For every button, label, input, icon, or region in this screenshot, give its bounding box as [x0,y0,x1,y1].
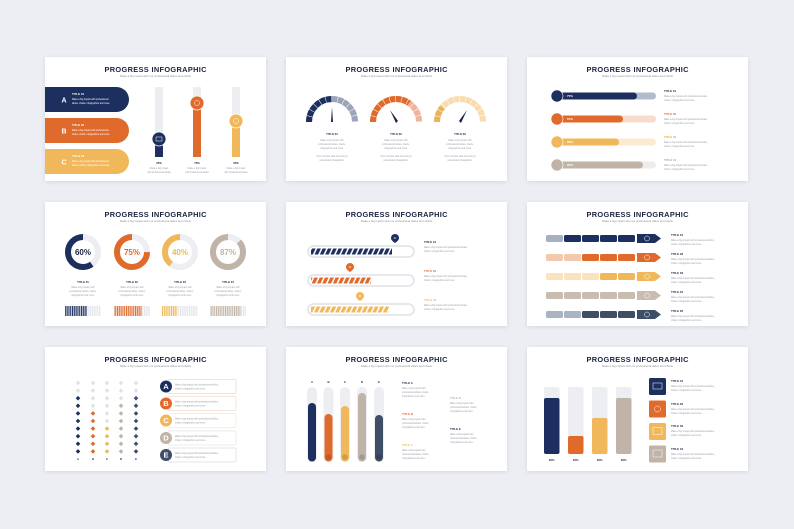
bar row 3 [551,135,708,148]
list A [160,380,236,394]
column bars: 25% [573,458,579,462]
row 01: Make a big impact with professional slides, [671,239,715,242]
pill bars: C [344,380,346,384]
gauge 2: Turn complex data into easy to [380,155,412,158]
gauge 1: infographics and more. [320,147,344,150]
tab B: Make a big impact with professional [72,129,109,132]
track 02: Make a big impact with professional slides, [424,275,468,278]
tab C: TITLE 03 [72,154,84,158]
title [346,65,448,78]
title: Make a big impact with our professional slides and charts [120,74,192,78]
icon item 02 [649,400,715,418]
tab C: Make a big impact with professional [72,160,109,163]
text E: professional slides, charts, [450,437,477,440]
tab C: C [61,160,67,166]
diamond chart: C [106,457,108,461]
track 03: 03 [359,296,362,298]
tab C [45,149,129,174]
track 03: charts, infographics and more. [424,308,455,311]
bar row 3: 58% [567,140,573,144]
text A: Make a big impact with [402,387,426,390]
bar row 2: TITLE 02 [664,112,676,116]
title: PROGRESS INFOGRAPHIC [586,210,689,219]
row 03 [546,271,715,284]
bar 75% [185,87,210,174]
tab A: A [61,98,67,104]
pill bars: D [361,380,363,384]
row 05: Make a big impact with professional slides, [671,315,715,318]
donut 87%: TITLE 04 [222,280,234,284]
icon item 02: charts, infographics and more. [671,412,702,415]
bar row 2: charts, infographics and more. [664,122,695,125]
text C: professional slides, charts, [402,453,429,456]
text A [402,381,429,398]
icon item 01 [649,378,715,395]
tab C: slides, charts, infographics and more. [72,164,110,167]
donut 75% [114,237,150,316]
gauge 2: TITLE 02 [390,132,402,136]
text A: TITLE A [402,381,414,385]
title: Make a big impact with our professional slides and charts [361,219,433,223]
list B: Make a big impact with professional slides, [175,400,219,404]
title: Make a big impact with our professional slides and charts [602,74,674,78]
list A: A [163,382,169,391]
title: PROGRESS INFOGRAPHIC [586,355,689,364]
text C [402,443,429,460]
bar row 2 [551,112,708,125]
title: PROGRESS INFOGRAPHIC [346,210,448,219]
bar 75%: Make a big impact [188,167,207,170]
tab A: slides, charts, infographics and more. [72,102,110,105]
list A: charts, infographics and more. [175,388,206,390]
slide 3: horizontal bars [527,57,748,181]
list B: charts, infographics and more. [175,404,206,408]
text A: infographics and more. [402,395,426,398]
row 05: TITLE 05 [671,309,683,313]
text D: infographics and more. [450,410,474,413]
row 04: TITLE 04 [671,290,683,294]
list D: charts, infographics and more. [175,439,206,442]
track 01: 01 [394,238,397,240]
gauge 2: professional slides, charts, [382,143,410,146]
list E: Make a big impact with professional slides, [175,452,219,455]
tab B [45,118,129,143]
pill bars: B [327,380,330,384]
row 04: charts, infographics and more. [671,300,702,303]
title: PROGRESS INFOGRAPHIC [104,355,207,364]
icon item 03: Make a big impact with professional slides, [671,430,715,433]
slide 8: vertical pill bars A-E [286,347,507,471]
icon item 01: Make a big impact with professional slides, [671,385,715,388]
gauge 3: Turn complex data into easy to [444,155,476,158]
gauge 2 [373,99,419,162]
tab A [45,87,129,112]
column bars: 90% [621,458,627,462]
title [586,65,689,78]
diamond chart [76,381,138,461]
donut 87%: Make a big impact with [216,286,240,289]
title: Make a big impact with our professional slides and charts [120,219,192,223]
diamond chart: D [120,457,122,461]
slide 6: segmented arrow bars [527,202,748,326]
row 02: charts, infographics and more. [671,262,702,265]
gauge 2: Make a big impact with [384,139,408,142]
track 02: TITLE 02 [424,269,436,273]
slide 5: striped progress tracks with pins [286,202,507,326]
bar row 3: Make a big impact with professional slides, [664,141,708,144]
bar row 1: Make a big impact with professional slides, [664,95,708,98]
list D: Make a big impact with professional slides, [175,435,219,438]
text C: Make a big impact with [402,449,426,452]
title: PROGRESS INFOGRAPHIC [586,65,689,74]
icon item 03: charts, infographics and more. [671,434,702,437]
icon item 02: Make a big impact with professional slides, [671,408,715,411]
gauge 2: understand infographics. [383,159,409,162]
icon item 03: TITLE 03 [671,424,683,428]
donut 40%: 40% [172,248,188,257]
gauge 1 [309,99,355,162]
column bars [544,387,632,462]
list D [160,431,236,445]
donut 75%: 75% [124,248,140,257]
donut 87% [210,237,246,316]
column bars: 50% [597,458,603,462]
row 02: TITLE 02 [671,252,683,256]
gauge 2: infographics and more. [384,147,408,150]
donut 60% [65,237,101,316]
diamond chart: E [135,457,137,461]
track 03: Make a big impact with professional slides, [424,304,468,307]
icon item 04: Make a big impact with professional slides, [671,453,715,456]
column bars: 90% [549,458,555,462]
gauge 3 [437,99,483,162]
list E [160,448,236,462]
icon item 04: TITLE 04 [671,447,683,451]
track 02: charts, infographics and more. [424,279,455,282]
row 01: charts, infographics and more. [671,243,702,246]
tab A: Make a big impact with professional [72,98,109,101]
bar 25%: Make a big impact [150,167,169,170]
title: PROGRESS INFOGRAPHIC [346,355,448,364]
text D: TITLE D [450,396,461,400]
bar row 3: TITLE 03 [664,135,676,139]
title [346,355,448,368]
text E: infographics and more. [450,441,474,444]
text E [450,427,477,444]
text E: Make a big impact with [450,433,474,436]
bar 75%: with professional slides [185,171,210,174]
track 01: charts, infographics and more. [424,250,455,253]
donut 60%: 60% [75,248,91,257]
text C: TITLE C [402,443,414,447]
tab B: slides, charts, infographics and more. [72,133,110,136]
row 02: Make a big impact with professional slides, [671,258,715,261]
gauge 3: understand infographics. [447,159,473,162]
list B: B [163,399,169,408]
icon item 01: TITLE 01 [671,379,683,383]
track 03: TITLE 03 [424,298,436,302]
bar row 2: Make a big impact with professional slides, [664,118,708,121]
list D: D [163,434,169,443]
row 01: TITLE 01 [671,233,683,237]
icon item 03 [649,423,715,440]
diamond chart: B [92,457,94,461]
donut 40%: infographics and more. [168,294,192,297]
donut 75%: infographics and more. [120,294,144,297]
track 02: 02 [349,267,352,269]
donut 60%: Make a big impact with [71,286,95,289]
bar row 1 [551,89,708,102]
tab B: TITLE 02 [72,123,84,127]
row 05 [546,309,715,322]
donut 40%: Make a big impact with [168,286,192,289]
donut 75%: TITLE 02 [126,280,138,284]
list B [160,396,236,410]
title: PROGRESS INFOGRAPHIC [104,210,207,219]
row 04 [546,290,715,303]
track 01 [308,234,468,257]
text D [450,396,477,413]
title: PROGRESS INFOGRAPHIC [104,65,207,74]
donut 87%: infographics and more. [216,294,240,297]
diamond chart: A [77,457,79,461]
track 02 [308,263,468,286]
donut 87%: 87% [220,248,236,257]
row 03: charts, infographics and more. [671,281,702,284]
donut 40%: TITLE 03 [174,280,186,284]
bar 50%: with professional slides [224,171,249,174]
slide 7: diamond columns with lettered list [45,347,266,471]
donut 40% [162,237,198,316]
icon item 04: charts, infographics and more. [671,457,702,460]
donut 75%: professional slides, charts, [118,290,146,293]
title: PROGRESS INFOGRAPHIC [346,65,448,74]
text B: professional slides, charts, [402,422,429,425]
text B [402,412,429,429]
slide 2: gauges [286,57,507,181]
bar row 1: TITLE 01 [664,89,676,93]
row 02 [546,252,715,265]
gauge 1: professional slides, charts, [318,143,346,146]
list E: E [163,451,169,460]
title [346,210,448,223]
slide 9: column bars with icon list [527,347,748,471]
donut 87%: professional slides, charts, [214,290,242,293]
track 01: TITLE 01 [424,240,436,244]
bar row 1: 75% [567,94,573,98]
bar 25%: with professional slides [147,171,172,174]
list C: C [163,416,169,425]
list C: charts, infographics and more. [175,422,206,424]
text B: Make a big impact with [402,418,426,421]
bar row 3: charts, infographics and more. [664,145,695,148]
gauge 3: infographics and more. [448,147,472,150]
tab A: TITLE 01 [72,92,84,96]
title [104,355,207,368]
text E: TITLE E [450,427,461,431]
gauge 3: Make a big impact with [448,139,472,142]
title [104,210,207,223]
list A: Make a big impact with professional slides, [175,384,219,386]
title [586,355,689,368]
gauge 1: Turn complex data into easy to [316,155,348,158]
bar 50% [224,87,249,174]
bar 50%: 50% [233,161,239,165]
row 04: Make a big impact with professional slides, [671,296,715,299]
title [586,210,689,223]
text D: professional slides, charts, [450,406,477,409]
row 01 [546,233,715,246]
donut 75%: Make a big impact with [120,286,144,289]
track 01: Make a big impact with professional slides, [424,246,468,249]
title: Make a big impact with our professional slides and charts [120,364,192,368]
icon item 01: charts, infographics and more. [671,389,702,392]
title: Make a big impact with our professional slides and charts [602,364,674,368]
title [104,65,207,78]
bar row 4: charts, infographics and more. [664,168,695,171]
title: Make a big impact with our professional slides and charts [361,364,433,368]
gauge 1: Make a big impact with [320,139,344,142]
pill bars: E [378,380,380,384]
gauge 1: TITLE 01 [326,132,338,136]
text D: Make a big impact with [450,402,474,405]
gauge 3: professional slides, charts, [446,143,474,146]
bar 75%: 75% [194,161,200,165]
row 05: charts, infographics and more. [671,319,702,322]
bar 25% [147,87,172,174]
list E: charts, infographics and more. [175,456,206,459]
pill bars [307,380,384,462]
bar row 4: Make a big impact with professional slides, [664,164,708,167]
icon item 02: TITLE 02 [671,402,683,406]
tab B: B [61,128,67,136]
bar row 4: TITLE 04 [664,158,676,162]
icon item 04 [649,446,715,462]
bar row 4: 90% [567,163,573,167]
title: Make a big impact with our professional slides and charts [361,74,433,78]
bar row 1: charts, infographics and more. [664,99,695,102]
donut 60%: TITLE 01 [77,280,89,284]
donut 60%: infographics and more. [71,294,95,297]
slide 1: vertical progress bars with tabs [45,57,266,181]
text B: infographics and more. [402,426,426,429]
row 03: TITLE 03 [671,271,683,275]
track 03 [308,292,468,315]
donut 40%: professional slides, charts, [166,290,194,293]
bar 25%: 25% [156,161,162,165]
row 03: Make a big impact with professional slides, [671,277,715,280]
text A: professional slides, charts, [402,391,429,394]
slide 4: donut charts [45,202,266,326]
title: Make a big impact with our professional slides and charts [602,219,674,223]
list C [160,414,236,428]
bar row 4 [551,158,708,171]
text C: infographics and more. [402,457,426,460]
bar 50%: Make a big impact [227,167,246,170]
text B: TITLE B [402,412,413,416]
donut 60%: professional slides, charts, [69,290,97,293]
gauge 3: TITLE 03 [454,132,466,136]
bar row 2: 67% [567,117,573,121]
pill bars: A [311,380,313,384]
list C: Make a big impact with professional slides, [175,418,219,420]
gauge 1: understand infographics. [319,159,345,162]
